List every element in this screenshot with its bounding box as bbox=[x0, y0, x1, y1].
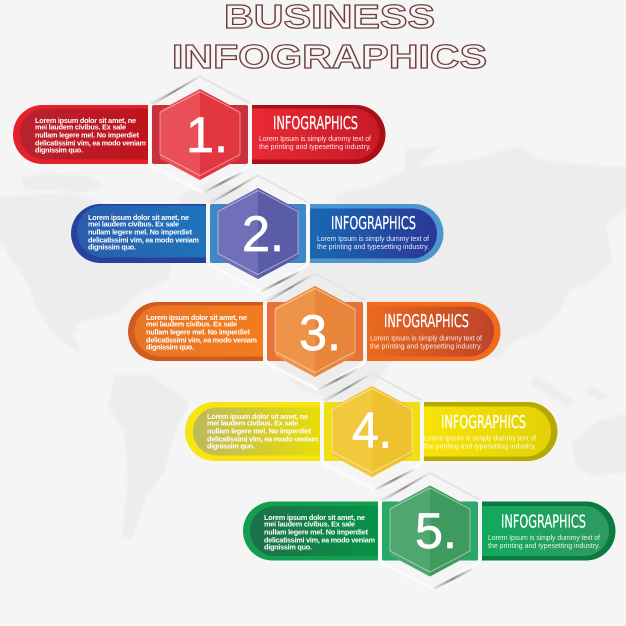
outer hexagon frame bbox=[380, 473, 480, 589]
body text: Lorem ipsum dolor sit amet, ne bbox=[207, 412, 308, 421]
description: Lorem Ipsum is simply dummy text of bbox=[370, 336, 482, 342]
heading: INFOGRAPHICS bbox=[384, 312, 469, 332]
body text bbox=[264, 513, 376, 552]
number: 3. bbox=[299, 305, 341, 361]
body text: nullam legere mel. No imperdiet bbox=[264, 528, 369, 536]
body text: delicatissimi vim, ea modo veniam bbox=[207, 434, 318, 444]
title bbox=[172, 0, 487, 75]
heading: INFOGRAPHICS bbox=[331, 214, 416, 234]
body text: Lorem ipsum dolor sit amet, ne bbox=[35, 116, 136, 125]
description bbox=[488, 535, 600, 550]
outer hexagon frame bbox=[322, 374, 422, 490]
body text: delicatissimi vim, ea modo veniam bbox=[88, 236, 200, 244]
description bbox=[259, 136, 371, 151]
heading: INFOGRAPHICS bbox=[273, 114, 358, 134]
hexagon bbox=[275, 286, 355, 377]
centre band bbox=[324, 402, 420, 461]
hexagon bbox=[332, 386, 412, 477]
description: the printing and typesetting industry. bbox=[488, 543, 600, 550]
body text: dignissim quo. bbox=[146, 342, 194, 352]
body text: nullam legere mel. No imperdiet bbox=[35, 130, 140, 140]
left pill bbox=[243, 502, 378, 560]
description bbox=[370, 336, 482, 350]
body text: delicatissimi vim, ea modo veniam bbox=[264, 536, 376, 544]
description: the printing and typesetting industry. bbox=[424, 444, 536, 450]
centre band bbox=[152, 105, 248, 164]
body text: dignissim quo. bbox=[207, 442, 255, 450]
left pill bbox=[71, 204, 206, 263]
body text: nullam legere mel. No imperdiet bbox=[88, 228, 193, 236]
body text bbox=[207, 412, 318, 450]
body text: mei laudem civibus. Ex sale bbox=[146, 320, 237, 328]
centre band bbox=[267, 302, 363, 361]
body text: dignissim quo. bbox=[35, 146, 83, 154]
hexagon bbox=[160, 89, 240, 180]
description bbox=[317, 236, 429, 251]
step 5 bbox=[243, 473, 616, 589]
number: 1. bbox=[186, 107, 228, 163]
outer hexagon frame bbox=[150, 76, 250, 192]
body text: nullam legere mel. No imperdiet bbox=[207, 426, 312, 436]
centre band bbox=[210, 204, 306, 263]
outer hexagon frame bbox=[265, 274, 365, 390]
centre band bbox=[382, 502, 478, 560]
number: 5. bbox=[415, 503, 457, 559]
body text: dignissim quo. bbox=[88, 242, 136, 252]
number: 2. bbox=[242, 206, 284, 262]
step 2 bbox=[71, 176, 444, 292]
body text: Lorem ipsum dolor sit amet, ne bbox=[264, 513, 365, 522]
right pill bbox=[367, 302, 500, 361]
left pill bbox=[128, 302, 263, 361]
hexagon bbox=[390, 486, 470, 576]
right pill bbox=[252, 105, 386, 164]
body text bbox=[88, 213, 200, 252]
left pill bbox=[185, 402, 320, 461]
right pill bbox=[424, 402, 558, 461]
number: 4. bbox=[352, 402, 392, 458]
description: Lorem Ipsum is simply dummy text of bbox=[424, 436, 536, 442]
step 4 bbox=[185, 374, 558, 490]
right pill bbox=[482, 502, 616, 560]
description bbox=[424, 436, 536, 450]
body text: mei laudem civibus. Ex sale bbox=[88, 220, 179, 228]
title line 2: INFOGRAPHICS bbox=[172, 38, 487, 75]
body text bbox=[35, 116, 146, 154]
world map bbox=[0, 146, 626, 540]
body text bbox=[146, 313, 258, 352]
body text: dignissim quo. bbox=[264, 542, 312, 552]
description: Lorem Ipsum is simply dummy text of bbox=[317, 236, 429, 243]
body text: Lorem ipsum dolor sit amet, ne bbox=[88, 213, 189, 222]
left pill bbox=[13, 105, 148, 164]
step 3 bbox=[128, 274, 500, 390]
step 1 bbox=[13, 76, 386, 192]
outer hexagon frame bbox=[208, 176, 308, 292]
description: the printing and typesetting industry. bbox=[317, 244, 429, 251]
body text: delicatissimi vim, ea modo veniam bbox=[35, 138, 146, 148]
right pill bbox=[310, 204, 444, 263]
hexagon bbox=[218, 188, 298, 279]
description: Lorem Ipsum is simply dummy text of bbox=[488, 535, 600, 542]
description: the printing and typesetting industry. bbox=[370, 344, 482, 350]
body text: nullam legere mel. No imperdiet bbox=[146, 328, 251, 336]
body text: Lorem ipsum dolor sit amet, ne bbox=[146, 313, 247, 322]
heading: INFOGRAPHICS bbox=[441, 413, 526, 433]
body text: mei laudem civibus. Ex sale bbox=[264, 520, 355, 528]
description: Lorem Ipsum is simply dummy text of bbox=[259, 136, 371, 143]
body text: mei laudem civibus. Ex sale bbox=[207, 418, 298, 428]
body text: mei laudem civibus. Ex sale bbox=[35, 122, 126, 132]
description: the printing and typesetting industry. bbox=[259, 144, 371, 151]
body text: delicatissimi vim, ea modo veniam bbox=[146, 336, 258, 344]
